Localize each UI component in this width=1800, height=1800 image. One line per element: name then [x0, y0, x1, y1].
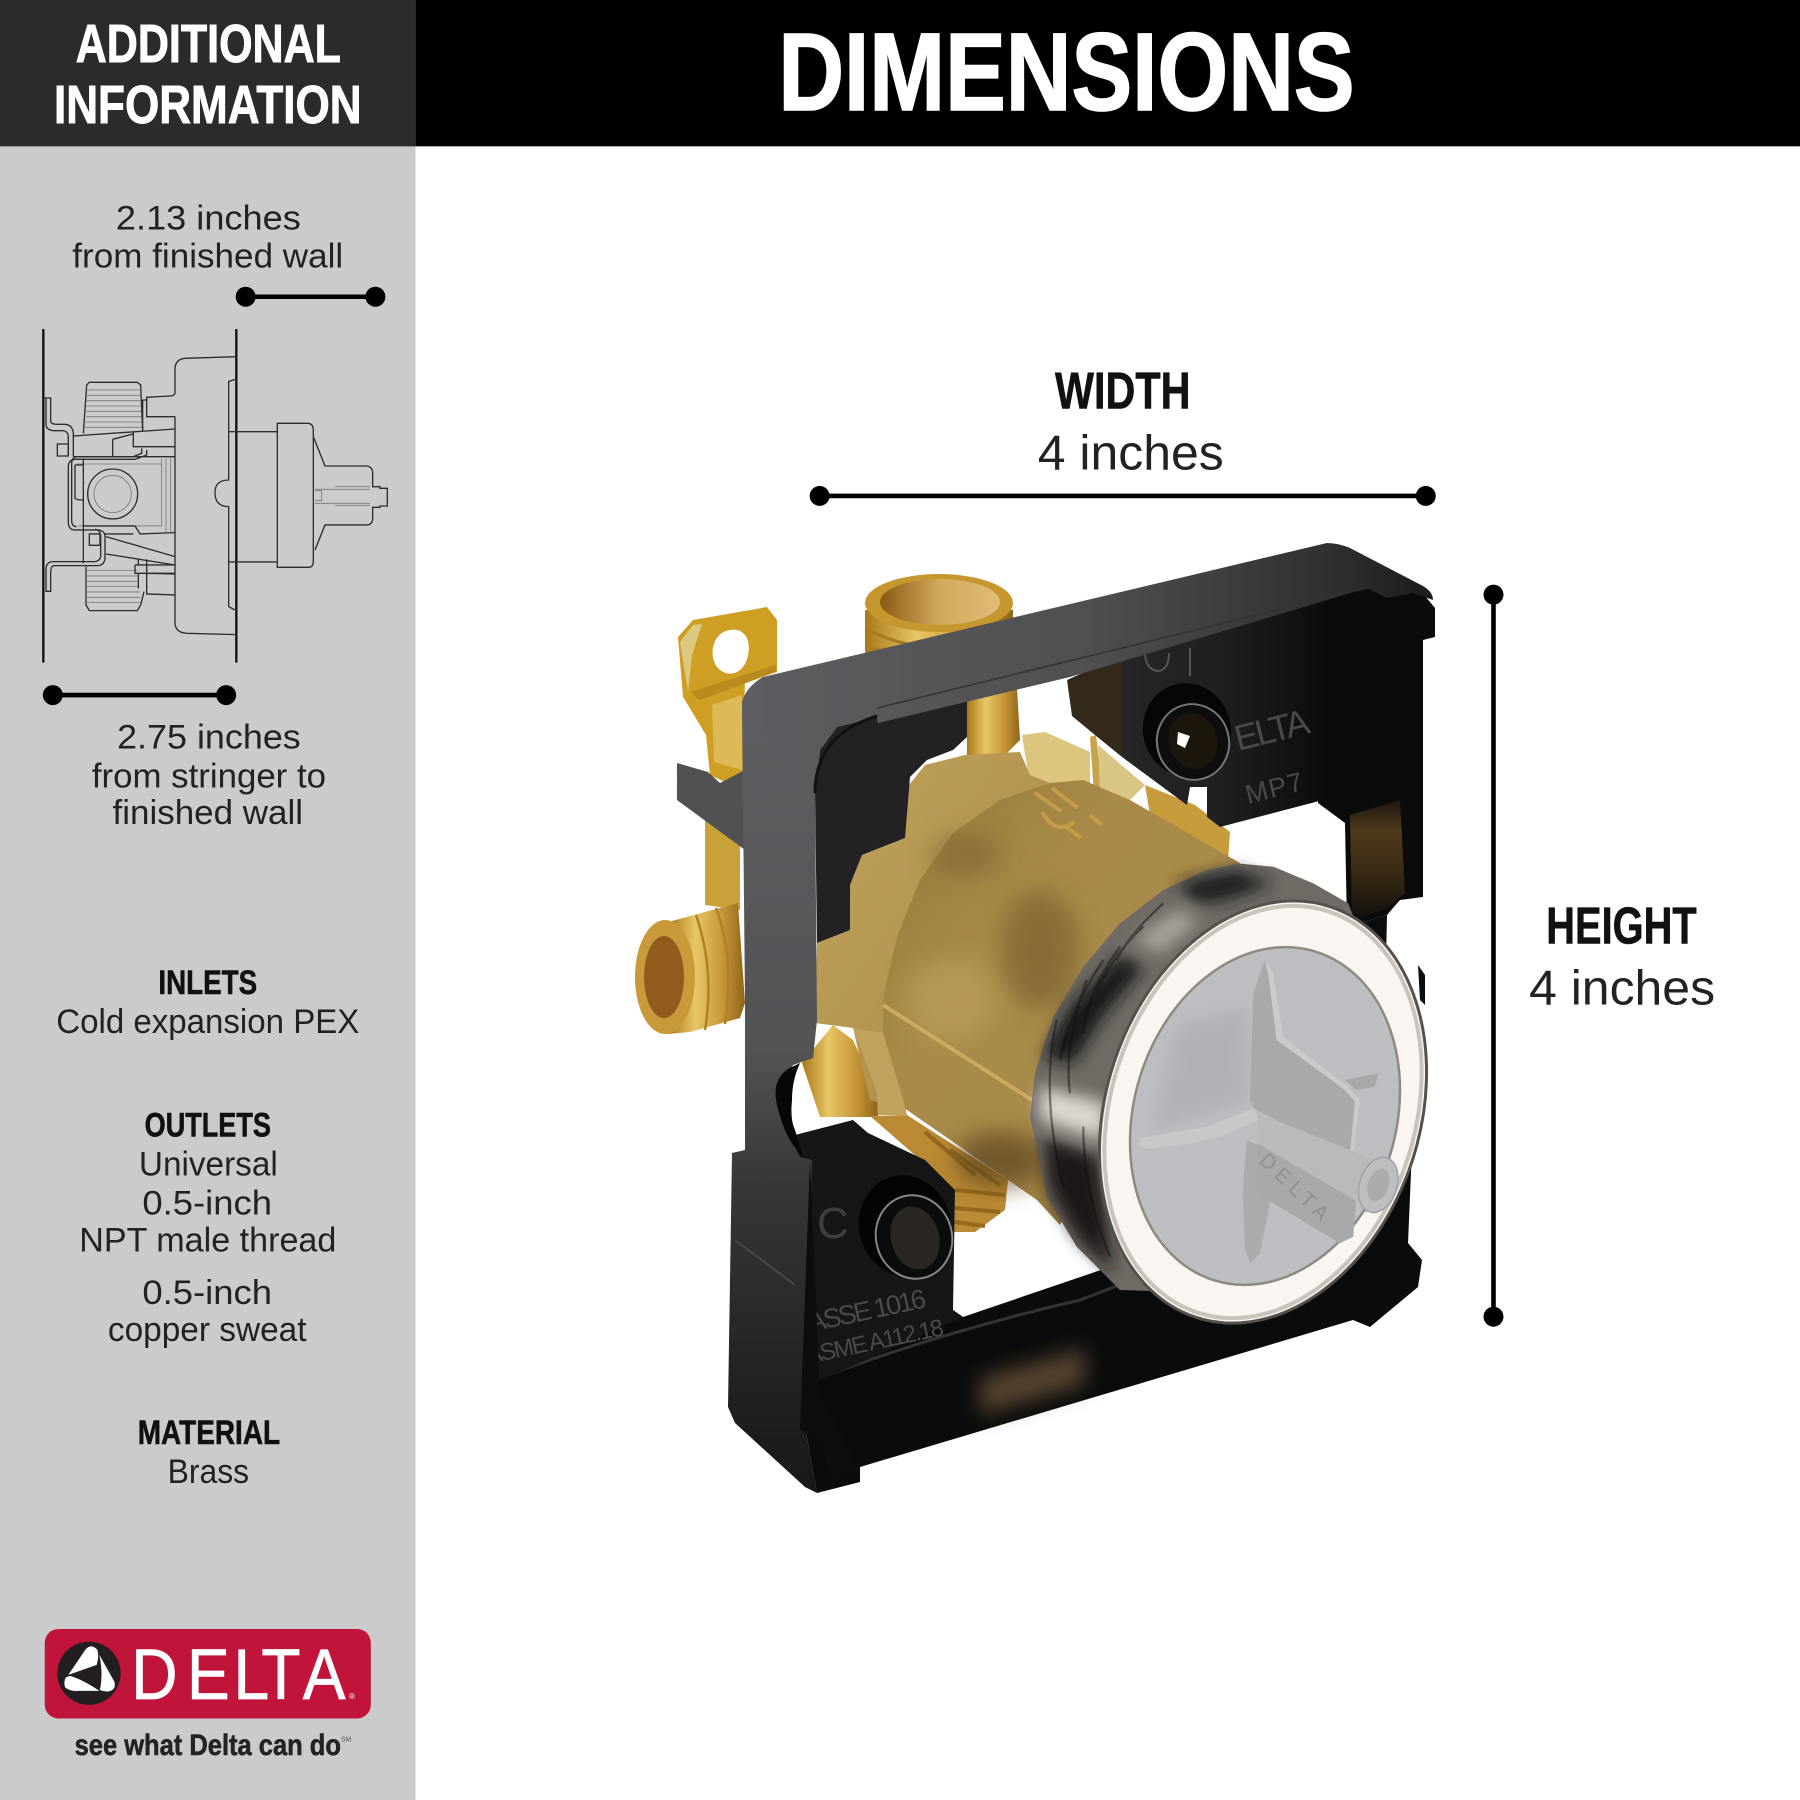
lower threaded outlet	[870, 1115, 1008, 1232]
trim ring bevel	[1053, 864, 1473, 1360]
spec: inlets: Cold expansion PEX	[56, 1003, 359, 1041]
frame inner black corner	[815, 697, 967, 943]
frame lower plate with grommet: ASME A112.18	[804, 1314, 946, 1370]
logo: Delta	[45, 1629, 371, 1718]
header band: additional information	[0, 0, 416, 146]
frame lower plate with grommet	[795, 1120, 963, 1385]
frame right plate with grommet	[1067, 590, 1323, 827]
dimension: width: WIDTH	[1055, 362, 1190, 420]
lower grommet	[847, 1165, 963, 1287]
plug details: DELTA	[1255, 1149, 1333, 1226]
sidebar heading: ADDITIONAL	[76, 14, 341, 74]
spec: material: Brass	[168, 1453, 249, 1491]
trim cap	[277, 423, 313, 567]
frame left bar	[728, 677, 877, 1493]
frame lower bar	[805, 1150, 1422, 1493]
text: stringer depth: 2.75 inches	[117, 718, 301, 756]
plug details	[1138, 960, 1405, 1263]
spec: material: MATERIAL	[138, 1414, 280, 1452]
spec: outlets: OUTLETS	[145, 1106, 271, 1144]
left PEX inlet	[635, 903, 745, 1034]
spec: inlets: INLETS	[158, 964, 257, 1002]
brass mounting strap	[678, 607, 777, 910]
sidebar heading: INFORMATION	[54, 75, 362, 135]
wall lines	[43, 329, 236, 663]
logo: Delta: DELTA	[131, 1636, 346, 1715]
tagline: see what Delta can do	[75, 1729, 341, 1762]
text: stringer depth	[92, 718, 326, 832]
spec: outlets: copper sweat	[108, 1311, 307, 1349]
icon: Delta triangle mark	[57, 1642, 121, 1705]
dimension: height	[1484, 585, 1715, 1327]
header band: dimensions	[416, 0, 1800, 146]
lower-left elbow	[802, 1025, 878, 1117]
dimension: width	[810, 362, 1436, 506]
technical side-view drawing	[43, 329, 387, 663]
dimension: width: 4 inches	[1038, 426, 1224, 481]
threaded neck	[967, 688, 1020, 760]
frame lower plate with grommet: C	[817, 1199, 849, 1248]
spec: outlets	[79, 1106, 336, 1349]
plastic tab	[677, 763, 745, 850]
dimension line: finished wall	[236, 287, 385, 307]
text: finished wall depth: 2.13 inches	[116, 200, 301, 238]
frame right plate with grommet: ELTA	[1230, 701, 1314, 759]
mounting strap	[43, 398, 73, 457]
trim ring	[1047, 858, 1479, 1366]
spec: outlets: NPT male thread	[79, 1221, 336, 1259]
spec: material	[138, 1414, 280, 1491]
spec: outlets: 0.5-inch	[142, 1185, 272, 1223]
cast lettering	[1035, 788, 1102, 838]
frame top bar	[742, 543, 1433, 793]
valve cylinder	[883, 780, 1240, 1225]
spec: inlets	[56, 964, 359, 1041]
housing	[147, 357, 236, 635]
valve body	[73, 429, 175, 457]
silver escutcheon sleeve	[1030, 863, 1370, 1293]
dimension: height: HEIGHT	[1546, 897, 1697, 955]
title: DIMENSIONS	[778, 11, 1355, 134]
frame right plate with grommet: MP7	[1242, 767, 1306, 810]
lower knurled ring	[86, 567, 144, 611]
top outlet pipe	[865, 574, 1020, 760]
sidebar panel	[0, 0, 416, 1800]
rear brass plate	[1022, 732, 1230, 862]
frame lower plate with grommet: ASSE 1016	[805, 1284, 929, 1338]
spec: outlets: Universal	[139, 1146, 278, 1184]
valve body block	[815, 752, 1050, 1115]
upper knurled ring	[83, 382, 143, 433]
brass mottling	[905, 835, 1080, 1188]
text: stringer depth: finished wall	[113, 794, 303, 832]
text: stringer depth: from stringer to	[92, 758, 326, 796]
dimension line: stringer to wall	[43, 685, 236, 705]
spec: outlets: 0.5-inch	[142, 1274, 272, 1312]
logo: Delta: ®	[349, 1692, 355, 1701]
sidebar heading	[54, 14, 362, 135]
frame right bar	[1318, 585, 1435, 1100]
product photo: valve in mounting frame	[635, 543, 1479, 1493]
tagline: SM	[341, 1736, 352, 1743]
grey plug	[1089, 913, 1441, 1319]
dimension: height: 4 inches	[1529, 960, 1715, 1015]
rear grommet	[1132, 673, 1242, 788]
text: finished wall depth: from finished wall	[72, 237, 343, 275]
text: finished wall depth	[72, 200, 343, 275]
plug tab	[1352, 1152, 1405, 1218]
